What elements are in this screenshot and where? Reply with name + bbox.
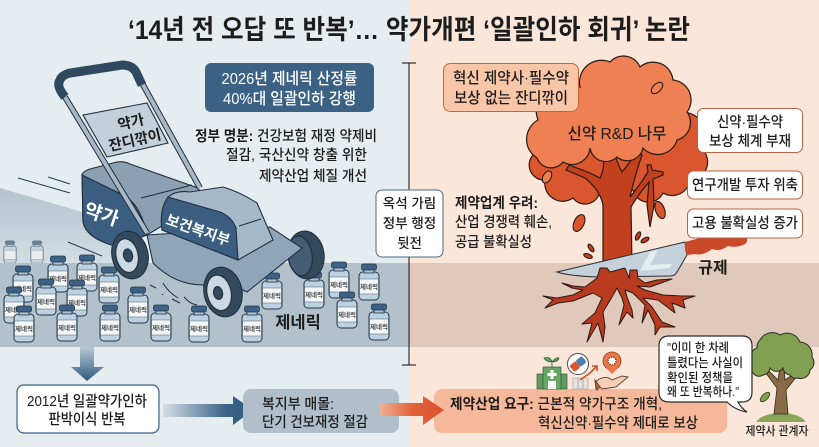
vials: generic drugs behind mower: 제네릭 <box>263 291 281 300</box>
vials: generic drugs behind mower: 제네릭 <box>37 297 55 306</box>
speed lines <box>18 177 102 256</box>
ministry engine cover <box>161 187 273 260</box>
speech bubble: stakeholder quote: 확인된 정책을 <box>667 370 733 385</box>
callout: R&D shrink: 연구개발 투자 위축 <box>692 177 798 194</box>
grass clippings <box>150 283 197 305</box>
text block: industry concerns: 공급 불확실성 <box>455 234 532 251</box>
panel: innovation reward <box>444 64 578 112</box>
title: ‘14년 전 오답 또 반복’… 약가개편 ‘일괄인하 회귀’ 논란 <box>128 15 690 45</box>
callout: employment uncertainty <box>688 209 802 238</box>
faded vials in mown area <box>4 241 43 263</box>
label: generics: 제네릭 <box>275 313 321 332</box>
ground band: generic drugs <box>0 263 410 347</box>
speech bubble: stakeholder quote <box>659 336 752 412</box>
roots <box>543 268 695 342</box>
panel: center note <box>376 190 443 257</box>
icon: pill <box>568 354 588 374</box>
illustration: R&D tree <box>527 56 747 342</box>
sign plate: 약가 <box>116 111 146 134</box>
vials: generic drugs behind mower: 제네릭 <box>14 284 32 293</box>
background: industry side <box>410 0 819 447</box>
panel: 2026 generic cut headline: 2026년 제네릭 산정률 <box>222 70 358 88</box>
rear foliage <box>529 112 708 204</box>
speech bubble: stakeholder quote: 왜 또 반복하나." <box>667 385 739 399</box>
panel: ministry focus <box>243 389 399 433</box>
panel: innovation reward: 보상 없는 잔디깎이 <box>454 89 568 107</box>
panel: 2026 generic cut headline: 40%대 일괄인하 강행 <box>223 90 356 108</box>
panel: ministry focus: 단기 건보재정 절감 <box>262 414 368 431</box>
vials: generic drugs behind mower: 제네릭 <box>190 324 208 333</box>
vials: generic drugs behind mower: 제네릭 <box>49 274 67 283</box>
arrow: to ministry box <box>163 396 253 425</box>
vials: generic drugs behind mower <box>4 255 389 342</box>
vials: generic drugs behind mower: 제네릭 <box>5 305 23 314</box>
icon: hand with gear pin <box>595 352 628 390</box>
sign plate <box>83 103 168 157</box>
icon: growth bars and arrow <box>573 366 597 389</box>
panel: innovation reward: 혁신 제약사·필수약 <box>453 69 569 87</box>
text block: government rationale: 절감, 국산신약 창출 위한 <box>226 147 367 164</box>
label: stakeholder: 제약사 관계자 <box>746 424 808 438</box>
small tree: stakeholder <box>749 333 814 436</box>
handle rails <box>65 83 200 233</box>
callout: R&D shrink <box>688 171 802 199</box>
speech bubble: stakeholder quote: "이미 한 차례 <box>667 341 729 355</box>
vials: generic drugs behind mower: 제네릭 <box>100 285 118 294</box>
center bracket divider <box>402 63 416 365</box>
front foliage <box>527 56 691 168</box>
icon: hospital with sprout <box>537 358 567 389</box>
sign plate: 잔디깎이 <box>107 126 163 155</box>
panel: center note: 옥석 가림 <box>383 196 436 211</box>
vials: generic drugs behind mower: 제네릭 <box>152 323 170 332</box>
panel: industry demand: 제약산업 요구: 근본적 약가구조 개혁, <box>450 396 662 413</box>
callout: no reward system <box>698 108 802 152</box>
arrow: down to 2012 box <box>71 347 104 381</box>
vials: generic drugs behind mower: 제네릭 <box>330 280 348 289</box>
callout: no reward system: 보상 체계 부재 <box>709 133 791 150</box>
panel: 2026 generic cut headline <box>205 63 374 112</box>
front wheels <box>107 228 153 282</box>
vials: generic drugs behind mower: 제네릭 <box>129 305 147 314</box>
background: government side <box>0 0 410 447</box>
vials: generic drugs behind mower: 제네릭 <box>15 324 33 333</box>
knife: regulation <box>557 238 747 277</box>
ground band: soil <box>410 263 819 347</box>
panel: center note: 정부 행정 <box>383 216 436 231</box>
vials: generic drugs behind mower: 제네릭 <box>243 324 261 333</box>
vials: generic drugs behind mower: 제네릭 <box>68 298 86 307</box>
callout: no reward system: 신약·필수약 <box>717 114 783 131</box>
handle grip <box>59 65 142 97</box>
vials: generic drugs behind mower: 제네릭 <box>338 310 356 319</box>
vials: generic drugs behind mower: 제네릭 <box>370 322 388 331</box>
tree label: 신약 R&D 나무 <box>568 125 666 143</box>
falling leaves <box>540 80 667 259</box>
vials: generic drugs behind mower: 제네릭 <box>360 282 378 291</box>
vials: generic drugs behind mower: 제네릭 <box>305 290 323 299</box>
arrow: to industry demand <box>380 396 444 425</box>
speech bubble: stakeholder quote: 틀렸다는 사실이 <box>667 356 743 370</box>
text block: industry concerns: 제약업계 우려: <box>455 195 538 212</box>
text block: government rationale: 정부 명분: 건강보험 재정 약제비 <box>195 128 377 145</box>
icon: lawn mower <box>59 65 327 320</box>
mower deck <box>147 227 302 292</box>
vials: generic drugs behind mower: 제네릭 <box>101 323 119 332</box>
vials: generic drugs behind mower: 제네릭 <box>78 273 96 282</box>
vials: generic drugs behind mower: 제네릭 <box>58 323 76 332</box>
rear wheel <box>285 229 327 281</box>
ministry engine cover: 보건복지부 <box>164 212 232 249</box>
trunk <box>566 152 663 268</box>
panel: 2012 repeat: 2012년 일괄약가인하 <box>27 393 147 410</box>
label: regulation: 규제 <box>698 259 728 277</box>
panel: center note: 뒷전 <box>397 236 422 251</box>
panel: 2012 repeat: 판박이식 반복 <box>48 411 126 428</box>
ground band: mown lawn slope <box>0 188 130 263</box>
panel: 2012 repeat <box>17 385 159 433</box>
panel: ministry focus: 복지부 매몰: <box>262 396 334 413</box>
callout: employment uncertainty: 고용 불확실성 증가 <box>692 215 798 232</box>
panel: industry demand: 혁신신약·필수약 제대로 보상 <box>538 415 698 432</box>
text block: government rationale <box>195 128 377 185</box>
grass bag <box>81 162 205 246</box>
text block: industry concerns <box>455 195 552 251</box>
text block: government rationale: 제약산업 체질 개선 <box>259 168 367 185</box>
text block: industry concerns: 산업 경쟁력 훼손, <box>455 214 552 231</box>
grass bag: 약가 <box>81 199 121 231</box>
panel: industry demand <box>434 389 727 433</box>
